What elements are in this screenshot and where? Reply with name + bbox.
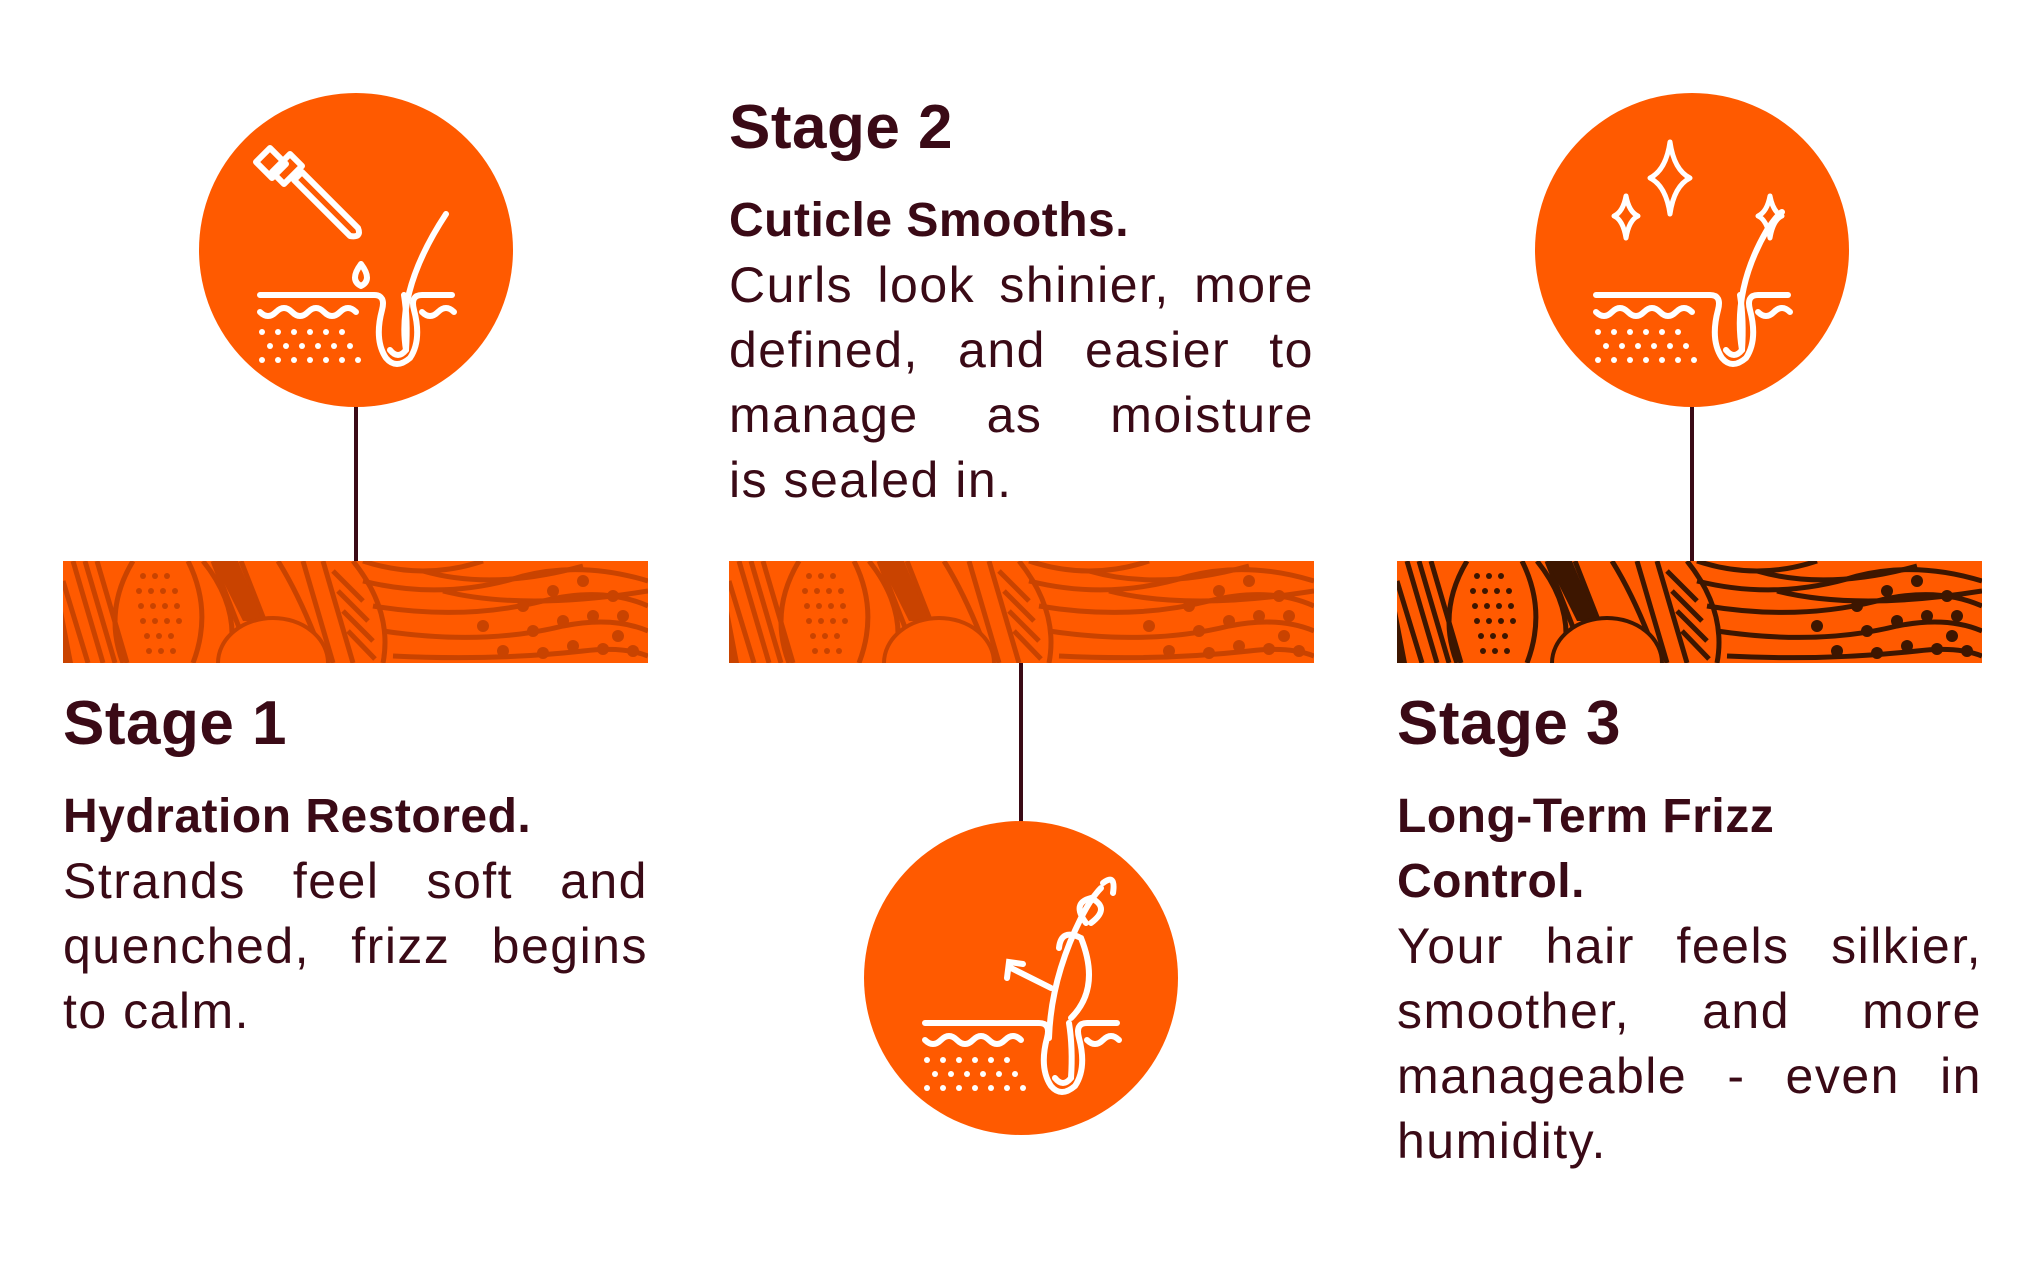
body: stage 3: manageable - even in [1397, 1048, 1982, 1104]
icon: dropper circle [199, 93, 513, 407]
body: stage 3: Your hair feels silkier, [1397, 918, 1982, 974]
body: stage 2: manage as moisture [729, 387, 1314, 443]
body: stage 2 [729, 194, 1314, 508]
body: stage 3: smoother, and more [1397, 983, 1982, 1039]
body: stage 3 [1397, 790, 1982, 1169]
heading: Stage 3: Stage 3 [1397, 689, 1621, 758]
text: stage 2 [729, 93, 1314, 508]
body: stage 3: Long-Term Frizz [1397, 790, 1774, 843]
body: stage 2: defined, and easier to [729, 322, 1314, 378]
connector line 3 [1690, 400, 1694, 563]
body: stage 1 [63, 790, 648, 1039]
body: stage 1: to calm. [63, 983, 250, 1039]
body: stage 1: quenched, frizz begins [63, 918, 648, 974]
body: stage 1: Hydration Restored. [63, 790, 531, 843]
connector line 2 [1019, 662, 1023, 826]
text: stage 1 [63, 689, 648, 1039]
connector line 1 [354, 400, 358, 563]
heading: Stage 2: Stage 2 [729, 93, 953, 162]
heading: Stage 1: Stage 1 [63, 689, 287, 758]
body: stage 2: is sealed in. [729, 452, 1013, 508]
band 2 [729, 561, 1314, 708]
band 1 [63, 561, 648, 708]
band 3 [1397, 561, 1982, 708]
icon: curly hair circle [864, 821, 1178, 1135]
body: stage 2: Cuticle Smooths. [729, 194, 1129, 247]
body: stage 2: Curls look shinier, more [729, 257, 1314, 313]
icon: sparkle circle [1535, 93, 1849, 407]
body: stage 1: Strands feel soft and [63, 853, 648, 909]
body: stage 3: humidity. [1397, 1113, 1607, 1169]
body: stage 3: Control. [1397, 855, 1585, 908]
text: stage 3 [1397, 689, 1982, 1169]
